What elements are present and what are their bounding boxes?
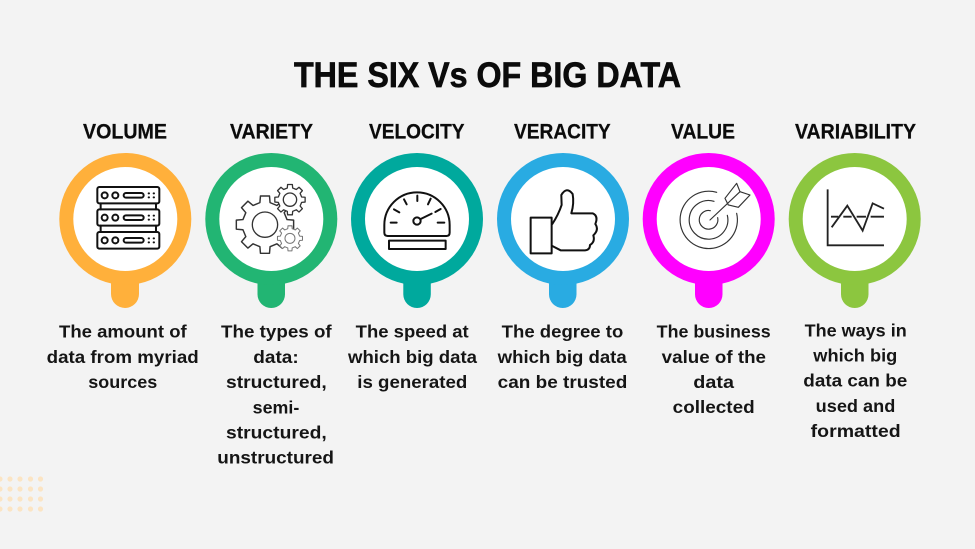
description: variety: The types of [221, 322, 332, 342]
description: variability: formatted [811, 421, 901, 441]
description: veracity: which big data [497, 347, 627, 367]
icon: target with arrow [680, 183, 750, 249]
description: variety: structured, [226, 422, 327, 442]
description: veracity: can be trusted [498, 372, 627, 392]
description: velocity: which big data [347, 347, 477, 367]
description: volume: sources [88, 372, 158, 392]
description: variability: data can be [803, 371, 908, 391]
description: variability: which big [812, 346, 897, 366]
title: THE SIX Vs OF BIG DATA [294, 56, 681, 95]
pin: magenta ring [643, 153, 775, 308]
panel: veracity [497, 120, 629, 392]
heading: value: VALUE [671, 120, 735, 144]
pin: blue ring [497, 153, 629, 308]
panel: volume [47, 120, 199, 392]
description: variety: data: [253, 347, 299, 367]
heading: variety: VARIETY [230, 120, 313, 144]
description: variety: semi- [253, 397, 299, 417]
description: volume [47, 322, 199, 392]
description: variability: The ways in [805, 321, 907, 341]
description: value [657, 322, 771, 417]
decorative dot grid [0, 476, 43, 512]
description: veracity [497, 322, 627, 392]
description: value: collected [673, 397, 755, 417]
description: value: value of the [662, 347, 766, 367]
description: velocity: The speed at [356, 322, 469, 342]
pin: orange ring [59, 153, 191, 308]
pin: teal ring [351, 153, 483, 308]
heading: velocity: VELOCITY [369, 120, 464, 144]
pin: lime ring [789, 153, 921, 308]
description: variety: unstructured [217, 447, 334, 467]
description: veracity: The degree to [502, 322, 623, 342]
pin: green ring [205, 153, 337, 308]
heading: veracity: VERACITY [514, 120, 611, 144]
panel: variety [205, 120, 337, 467]
description: value: The business [657, 322, 771, 342]
description: variety [217, 322, 334, 467]
description: velocity [347, 322, 477, 392]
description: variability: used and [816, 396, 895, 416]
description: velocity: is generated [357, 372, 467, 392]
description: value: data [693, 372, 734, 392]
panel: velocity [347, 120, 483, 392]
description: variability [803, 321, 908, 441]
panel: variability [789, 120, 921, 441]
description: volume: data from myriad [47, 347, 199, 367]
icon: line chart [828, 189, 884, 245]
icon: server rack [97, 187, 159, 249]
description: variety: structured, [226, 372, 327, 392]
heading: volume: VOLUME [83, 120, 167, 144]
heading: variability: VARIABILITY [795, 120, 916, 144]
description: volume: The amount of [59, 322, 187, 342]
icon: speedometer [384, 192, 450, 249]
icon: gears [236, 185, 305, 253]
panel: value [643, 120, 775, 417]
icon: thumbs up [531, 190, 597, 253]
